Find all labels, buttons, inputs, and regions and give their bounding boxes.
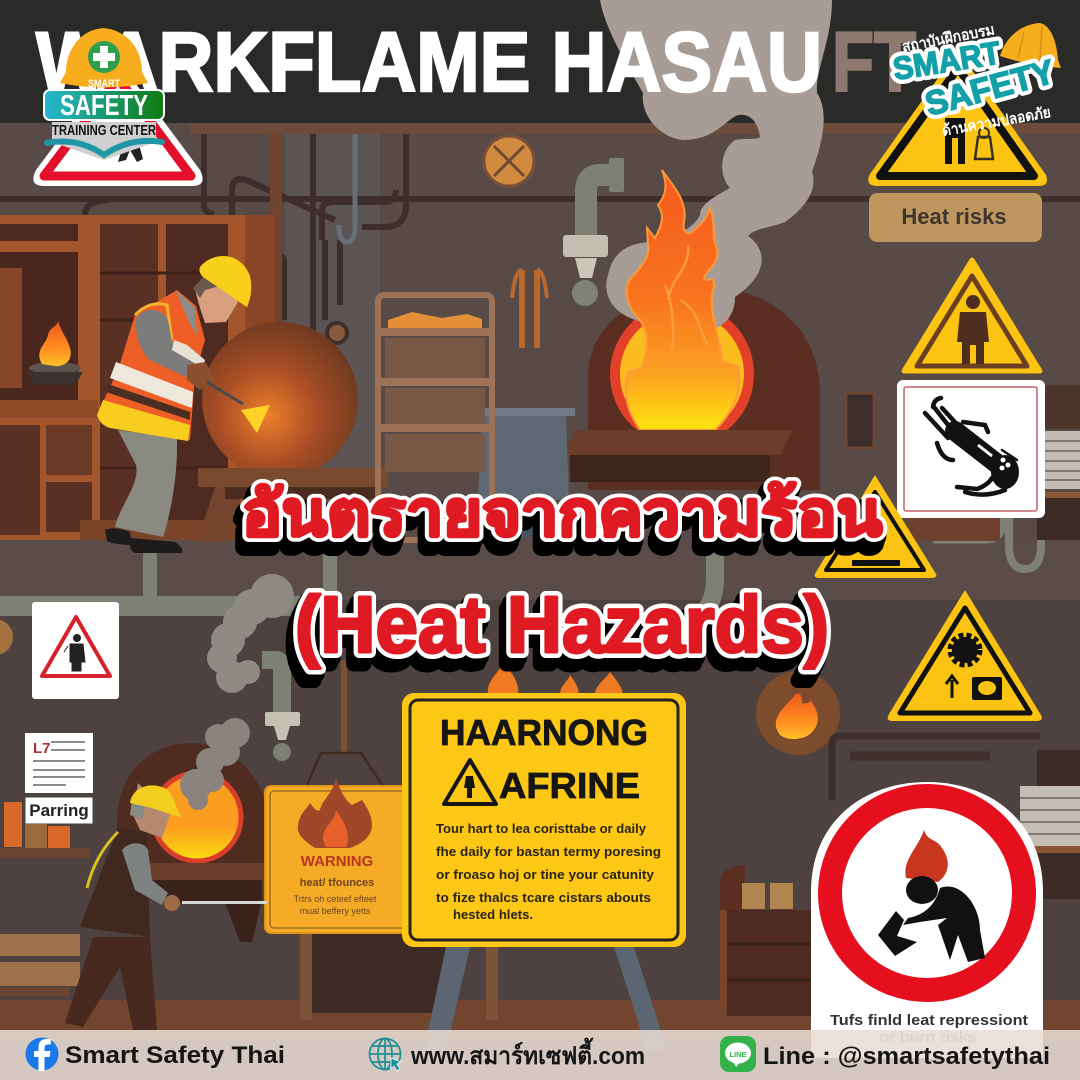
- lower pipe and lamp: [262, 660, 347, 761]
- sign: red triangle behind logo: [33, 60, 203, 186]
- icon: burning figure: [878, 830, 985, 962]
- icon: facebook: [26, 1038, 58, 1071]
- footer line text: Line : @smartsafetythai: [763, 1043, 1050, 1070]
- title: WARKFLAME HASAUFT: FT: [832, 15, 916, 109]
- heading line Thai: อันตรายจากความร้อน: [239, 486, 879, 555]
- hanging lamp and pipe: [563, 158, 624, 306]
- logo thai caption top: สถาบันฝึกอบรม: [900, 20, 996, 56]
- label: Heat risks: [869, 193, 1042, 242]
- main sign body text: to fize thalcs tcare cistars abouts: [436, 890, 651, 905]
- title: WARKFLAME HASAUFT: WARKFLAME HASAU: [36, 15, 822, 109]
- sign: person triangle: [904, 260, 1040, 371]
- heading line Thai: อันตรายจากความร้อน: [237, 492, 877, 561]
- warning sign orange: Trtrs oh ceteef efteet: [294, 894, 377, 904]
- notice paper: [25, 733, 93, 793]
- large smoke column: [600, 0, 832, 330]
- warning sign orange: heat/ tfounces: [300, 877, 374, 889]
- icon: cabinet flame: [27, 321, 83, 385]
- heading line Thai: อันตรายจากความร้อน: [242, 480, 882, 549]
- small flames above main sign: [488, 662, 622, 695]
- heading line English: (Heat Hazards): [295, 580, 829, 669]
- footer contact bar: [0, 1030, 1080, 1080]
- prohibition sign: or burn risks: [880, 1030, 976, 1046]
- footer facebook text: Smart Safety Thai: [65, 1042, 285, 1069]
- logo helmet: [60, 28, 148, 88]
- back shelves on the right: [907, 385, 1080, 899]
- sign: white creature card: [897, 380, 1045, 518]
- main sign body text: Tour hart to lea coristtabe or daily: [436, 821, 647, 836]
- lower furnace: [117, 743, 267, 942]
- furnace arch: [588, 287, 820, 490]
- worker with brown vest: [65, 783, 267, 1030]
- main sign body text: or froaso hoj or tine your catunity: [436, 867, 655, 882]
- white sign: red triangle left: [32, 602, 119, 699]
- icon: warning triangle: [444, 760, 496, 804]
- panel: wooden cabinet left: [0, 215, 380, 540]
- main sign heading AFRINE: AFRINE: [499, 765, 640, 806]
- prohibition sign: [811, 782, 1043, 1058]
- wooden cabinet lower right: [720, 865, 817, 1016]
- forge table and bucket: [472, 408, 793, 538]
- logo right: Smart Safety: [868, 20, 1061, 186]
- heading line English: (Heat Hazards): [289, 592, 823, 681]
- label: Heat risks: Heat risks: [901, 204, 1007, 229]
- logo SAFETY badge: SAFETY: [60, 90, 148, 122]
- logo SAFETY: SAFETY: [921, 53, 1059, 124]
- main sign heading HAARNONG: HAARNONG: [440, 712, 648, 753]
- icon: globe: [370, 1038, 401, 1071]
- logo right: Smart Safety: SAFETY: [921, 53, 1059, 124]
- left shelf with boxes: [0, 802, 90, 996]
- icon: wall flame badge: [756, 671, 840, 755]
- orange glowing orb: [202, 322, 358, 478]
- logo SMART text: SMART: [88, 78, 120, 90]
- heading line Thai: อันตรายจากความร้อน: [242, 480, 882, 549]
- logo thai caption bottom: ด้านความปลอดภัย: [941, 104, 1052, 140]
- logo right: Smart Safety: SMART: [890, 34, 1003, 87]
- lower furnace smoke: [180, 718, 250, 810]
- logo book pages: [52, 122, 156, 160]
- furnace fire ring: [615, 307, 749, 441]
- worker with orange vest: [97, 256, 270, 553]
- logo left: Smart Safety Training Center: [33, 28, 203, 186]
- sign: fan triangle: [888, 590, 1042, 721]
- label: Parring: Parring: [29, 801, 89, 820]
- icon: LINE: LINE: [729, 1050, 747, 1059]
- heading line English: (Heat Hazards): [295, 580, 829, 669]
- small wall door: [846, 393, 874, 448]
- main yellow warning sign: [402, 693, 686, 1050]
- pipe frame above prohibition sign: [832, 736, 1040, 800]
- main sign body text: hested hlets.: [453, 907, 533, 922]
- footer website text: www.สมาร์ทเซฟตี้.com: [410, 1037, 645, 1070]
- heading line English: (Heat Hazards): [292, 586, 826, 675]
- logo SMART: SMART: [890, 34, 1003, 87]
- top title band: [0, 0, 1080, 123]
- warning sign orange: WARNING: [301, 853, 373, 870]
- hanging tools: [512, 270, 547, 348]
- main heading: อันตรายจากความร้อน / (Heat Hazards): [237, 480, 882, 681]
- crate and frame under warning sign: [300, 933, 498, 1020]
- sign: yellow triangle with figure: [868, 50, 1047, 186]
- main sign body text: [436, 821, 661, 922]
- warning sign orange: mual beffery yetts: [300, 906, 371, 916]
- icon: LINE: [720, 1036, 756, 1072]
- label: Parring: [25, 797, 93, 824]
- valve wheel: [484, 136, 534, 186]
- equipment rack: [378, 295, 492, 540]
- furnace flames: [626, 170, 739, 430]
- wall clock: [0, 619, 13, 655]
- main sign body text: fhe daily for bastan termy poresing: [436, 844, 661, 859]
- warning sign orange: [265, 753, 415, 933]
- sign: triangle behind title: [815, 475, 936, 578]
- logo open book: [47, 141, 162, 155]
- logo training center text: TRAINING CENTER: [52, 122, 156, 139]
- table under orb: [197, 468, 388, 542]
- warning flame icon: [298, 778, 372, 848]
- notice paper: L7: [33, 740, 51, 757]
- smoke plume lower left: [207, 574, 294, 693]
- logo right helmet: [1000, 23, 1061, 68]
- prohibition sign caption: Tufs finld leat repressiont: [830, 1013, 1028, 1029]
